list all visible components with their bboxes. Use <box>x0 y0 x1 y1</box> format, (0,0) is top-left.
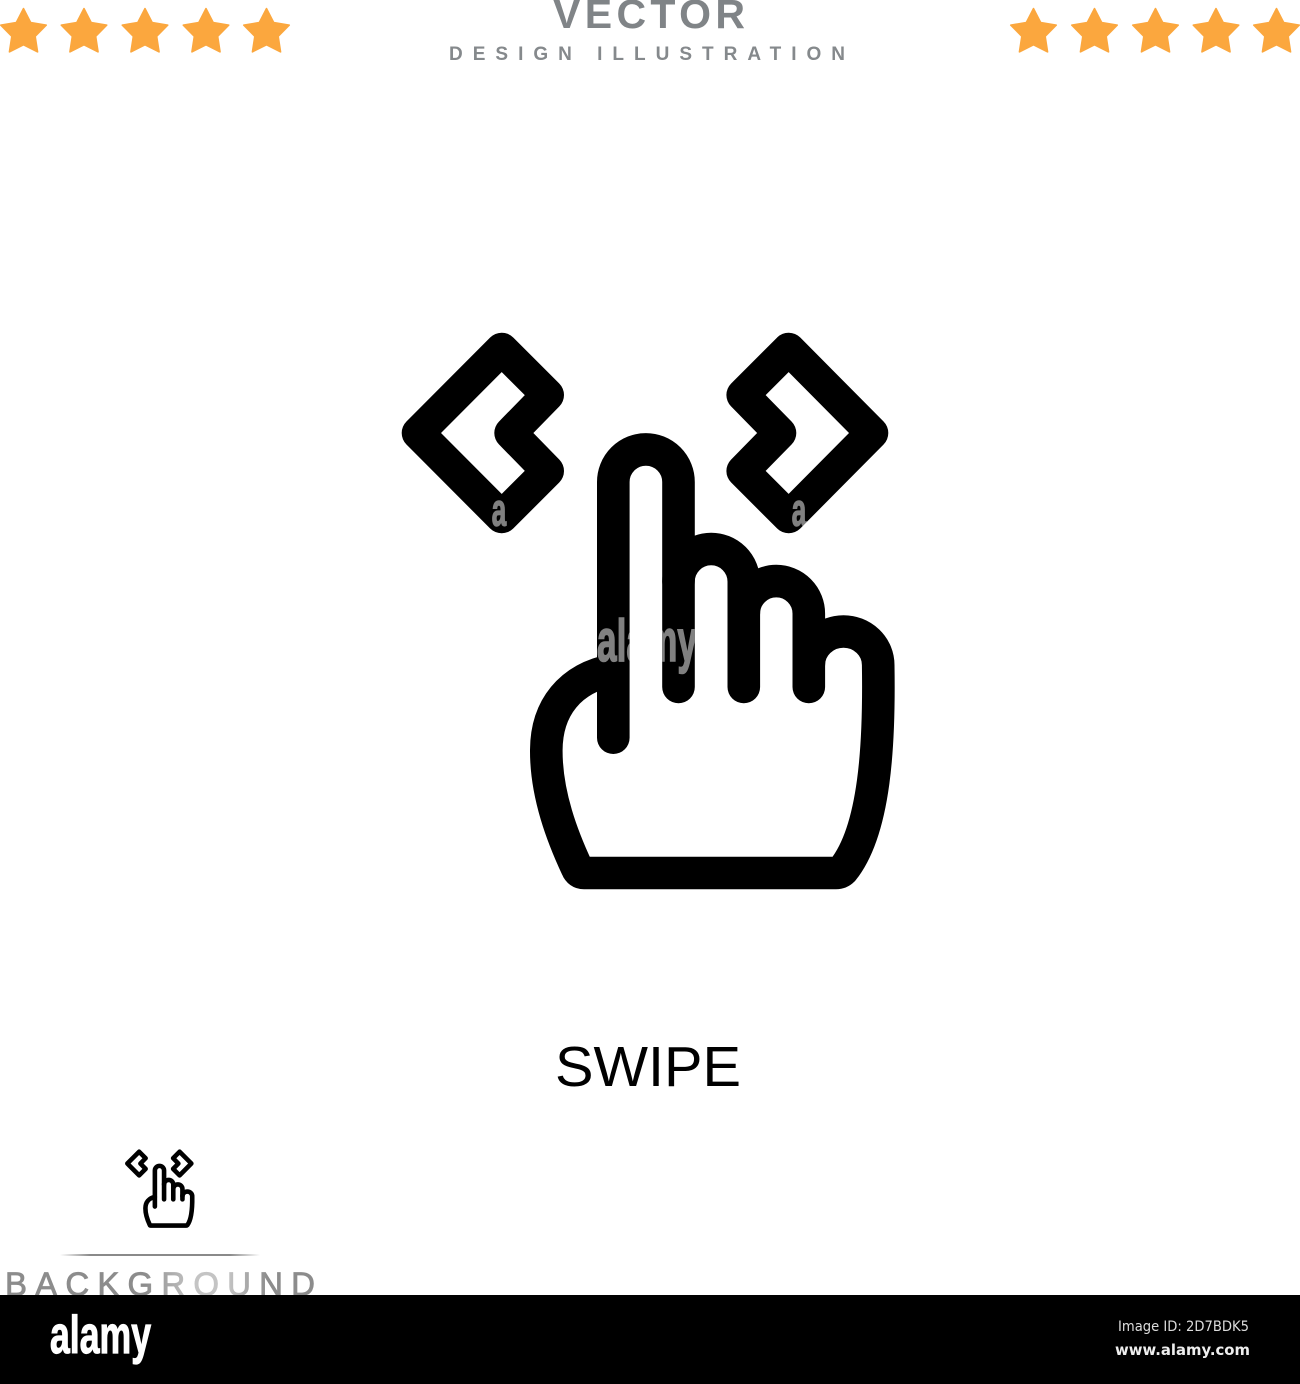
icon: left arrow <box>418 349 548 517</box>
right star rating <box>1011 8 1299 52</box>
left star rating <box>1 8 289 52</box>
subheading: DESIGN ILLUSTRATION: DESIGN ILLUSTRATION <box>449 44 845 65</box>
main icon: swipe hand with arrows <box>418 349 878 873</box>
icon: palm and pinky outline <box>546 632 878 873</box>
image ID: Image ID: 2D7BDK5 <box>1118 1319 1249 1335</box>
watermark: letter on left arrow: a <box>492 484 507 536</box>
watermark: letter on right arrow: a <box>792 484 807 536</box>
icon: right arrow <box>743 349 872 517</box>
website URL: www.alamy.com <box>1115 1341 1250 1359</box>
icon: ring finger <box>744 581 809 687</box>
icon title: SWIPE: SWIPE <box>555 1035 741 1099</box>
icon: middle finger <box>678 549 744 687</box>
watermark: centre alamy mark on finger: alamy <box>597 608 697 674</box>
black footer bar <box>0 1295 1300 1384</box>
footer label: BACKGROUND: BACKGROUND <box>5 1266 315 1302</box>
logo: alamy: alamy <box>50 1306 151 1365</box>
small icon preview <box>127 1152 192 1226</box>
icon: index finger <box>613 449 678 738</box>
